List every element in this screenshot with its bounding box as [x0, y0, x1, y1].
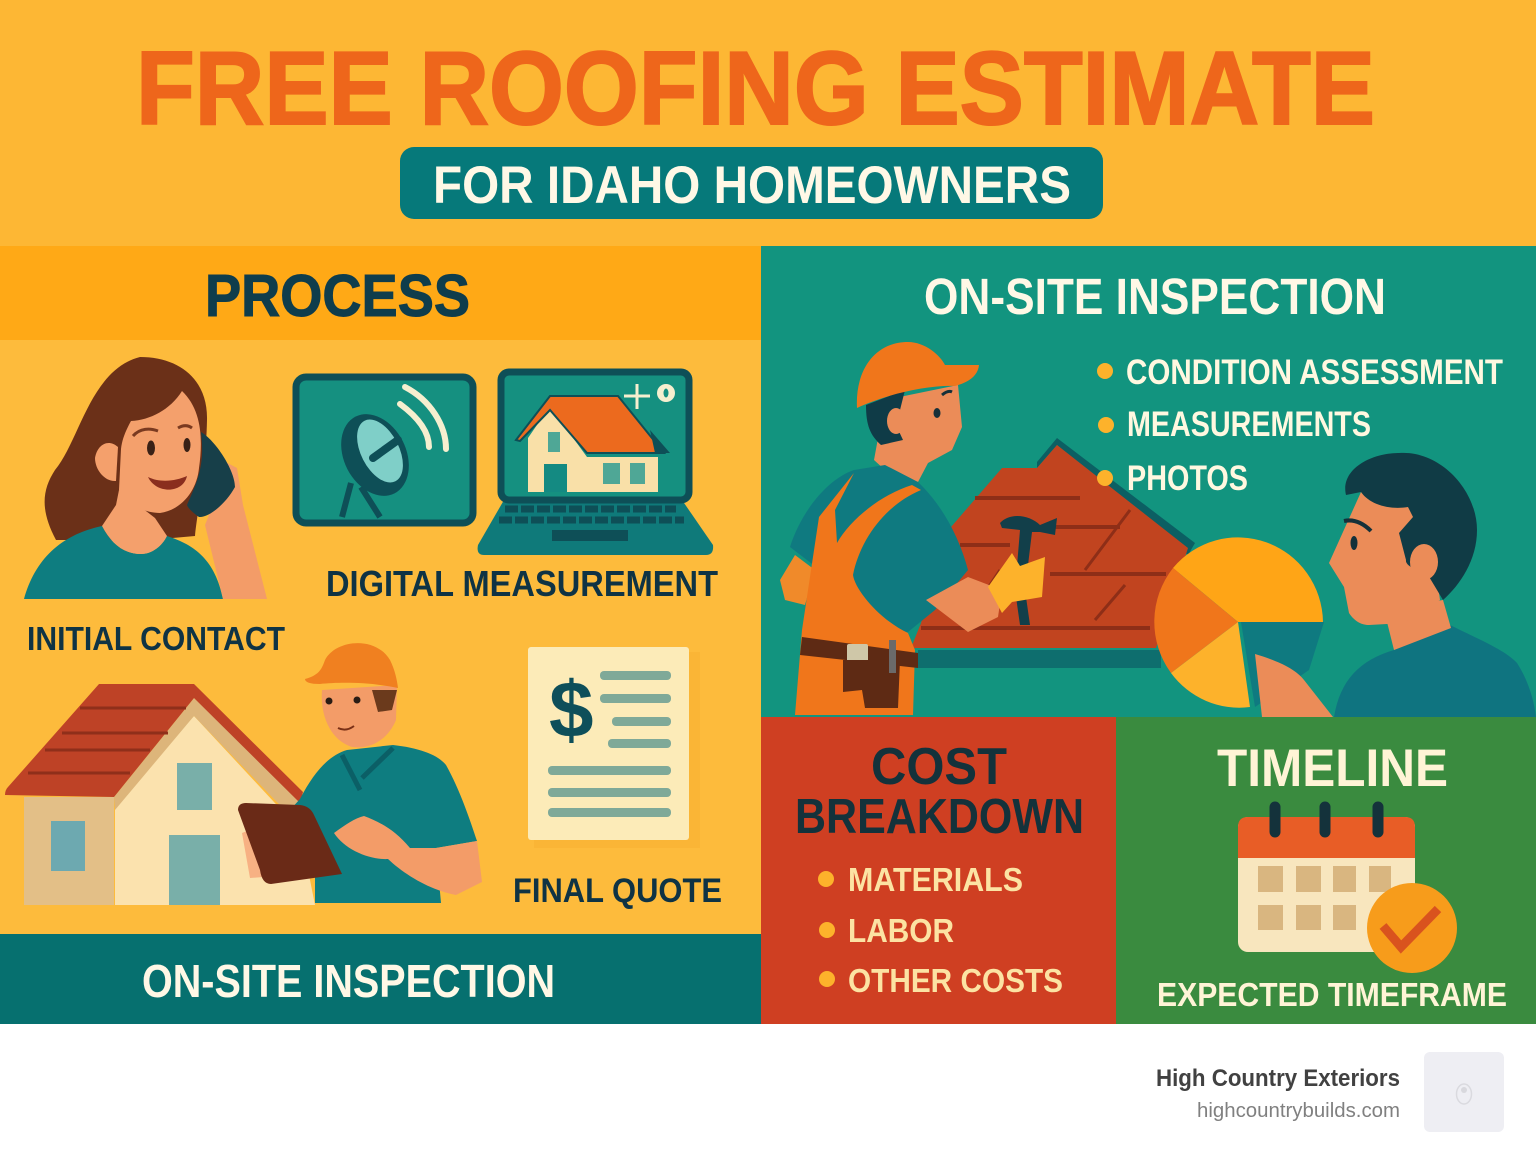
process heading band: PROCESS — [205, 263, 470, 329]
label: initial contact: INITIAL CONTACT — [27, 620, 285, 657]
icon: woman on phone — [24, 357, 267, 599]
panel: cost breakdown — [761, 717, 1116, 1024]
label: final quote: FINAL QUOTE — [513, 872, 722, 910]
website: highcountrybuilds.com — [1197, 1100, 1400, 1122]
icon: calendar — [1238, 807, 1457, 973]
roof illustration — [911, 438, 1195, 668]
label: digital measurement: DIGITAL MEASUREMENT — [326, 563, 718, 604]
hammer — [1000, 516, 1057, 625]
on-site inspection band: ON-SITE INSPECTION — [142, 955, 555, 1007]
panel: process — [0, 246, 761, 1024]
logo placeholder — [1424, 1052, 1504, 1132]
cost items: LABOR — [848, 912, 954, 949]
heading: BREAKDOWN — [795, 790, 1084, 844]
icon: homeowner — [1255, 453, 1536, 717]
icon: laptop with house — [478, 372, 713, 555]
icon: house — [5, 684, 315, 905]
icon: estimator with tablet — [238, 643, 482, 903]
process heading band — [0, 246, 761, 340]
header banner — [0, 0, 1536, 246]
cost items — [818, 861, 1063, 999]
heading: TIMELINE — [1217, 739, 1448, 798]
tool belt — [800, 637, 918, 668]
bullet list: PHOTOS — [1127, 459, 1248, 498]
cost items: OTHER COSTS — [848, 962, 1063, 999]
cost items: MATERIALS — [848, 861, 1023, 898]
label: expected timeframe: EXPECTED TIMEFRAME — [1157, 976, 1507, 1013]
check badge — [1367, 883, 1457, 973]
heading: COST — [871, 738, 1007, 796]
icon: roofer with hammer — [780, 342, 1057, 715]
brand name: High Country Exteriors — [1156, 1065, 1400, 1092]
panel: timeline — [1116, 717, 1536, 1024]
heading: ON-SITE INSPECTION — [924, 268, 1386, 325]
subtitle pill: FOR IDAHO HOMEOWNERS — [433, 156, 1071, 215]
icon: quote document — [528, 647, 700, 848]
icon: satellite dish screen — [296, 377, 473, 523]
pie chart — [1154, 537, 1324, 708]
bullet list: MEASUREMENTS — [1127, 405, 1371, 444]
dollar sign: $ — [549, 665, 594, 754]
title: FREE ROOFING ESTIMATE — [136, 31, 1375, 147]
panel: on-site inspection — [761, 246, 1536, 717]
footer — [0, 1024, 1536, 1154]
on-site inspection band — [0, 934, 761, 1024]
bullet list — [1097, 353, 1503, 498]
heading — [795, 738, 1084, 844]
